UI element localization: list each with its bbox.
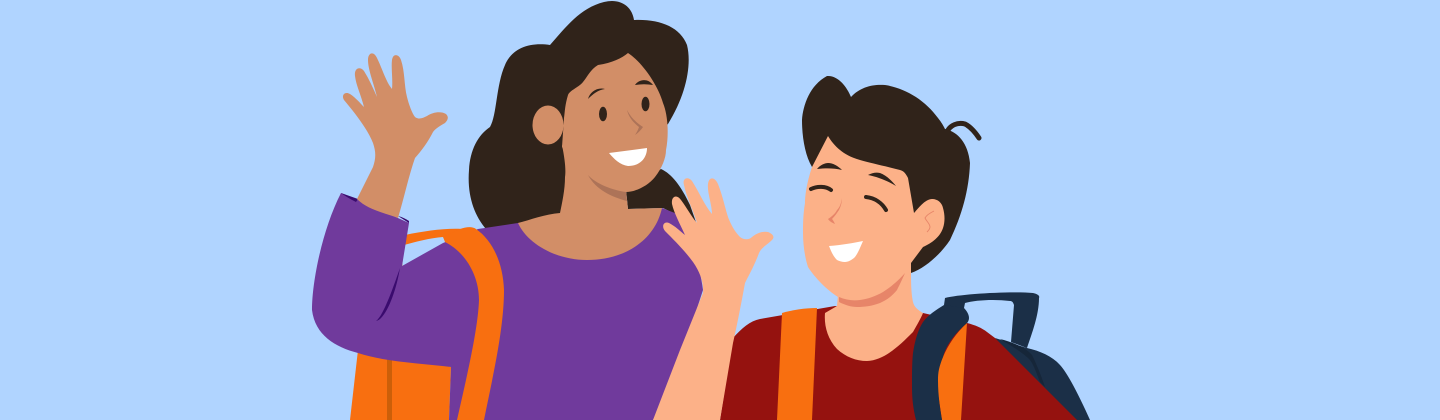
boy ear [905, 199, 944, 250]
figure: girl [312, 1, 703, 420]
boy face [803, 136, 923, 300]
girl backpack [350, 350, 451, 420]
boy hair curl [947, 123, 979, 138]
backpack fold [1000, 339, 1045, 387]
boy arm and hand [653, 178, 773, 420]
boy neck [825, 265, 923, 361]
chin shadow [839, 273, 905, 307]
backpack handle [944, 292, 1039, 348]
ear detail [925, 211, 934, 232]
boy closed eyes [811, 187, 886, 210]
shoulder strap [443, 227, 504, 420]
girl eyes [599, 97, 650, 121]
boy backpack [944, 292, 1090, 420]
girl ponytail [626, 169, 697, 225]
jaw shadow [588, 175, 627, 201]
girl backpack strap behind [398, 229, 462, 268]
backpack body [350, 350, 451, 420]
boy nose [828, 198, 842, 224]
boy navy strap [912, 305, 969, 420]
girl arm and hand [343, 53, 448, 218]
girl top [312, 193, 703, 420]
girl nose [627, 110, 643, 135]
girl smile [609, 148, 647, 166]
boy shirt [720, 306, 1077, 420]
figure: boy [653, 76, 1090, 420]
girl face [562, 53, 668, 192]
boy orange strap right [936, 323, 967, 420]
boy orange strap left [777, 308, 817, 420]
boy hair [802, 76, 970, 273]
girl neck and collar [518, 145, 662, 260]
backpack body [995, 338, 1090, 420]
girl ear [532, 106, 564, 144]
boy eyebrows [817, 163, 896, 186]
girl hair [469, 1, 689, 229]
sleeve cuff shadow [341, 193, 409, 223]
girl eyebrows [588, 80, 653, 99]
backpack seam [387, 358, 392, 420]
boy smile [829, 241, 863, 262]
sleeve crease [376, 268, 400, 321]
